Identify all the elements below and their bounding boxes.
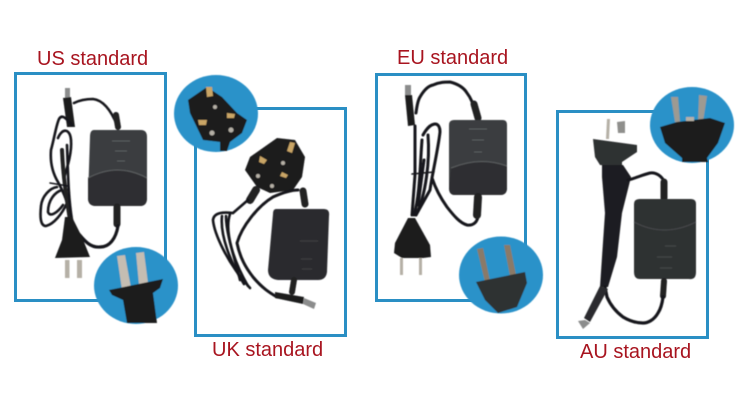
panel: UK standard [174,75,346,361]
heading: AU standard: AU standard [580,341,691,363]
adapter: US [41,88,147,278]
panel: EU standard [376,47,543,314]
frame: EU [376,74,526,300]
frame: AU [558,112,708,338]
panel: US standard [16,48,178,324]
heading: US standard: US standard [37,48,148,70]
frame: US [16,74,166,300]
adapter: EU [394,82,507,275]
inset: EU plug [459,236,543,314]
inset: UK plug [174,75,258,152]
frame: UK [196,108,346,336]
heading: EU standard: EU standard [397,47,508,69]
adapter: AU [578,119,696,329]
heading: UK standard: UK standard [212,339,323,361]
panel: AU standard [558,87,734,363]
inset: AU plug [650,87,734,163]
adapter: UK [213,138,329,309]
inset: US plug [94,247,178,324]
